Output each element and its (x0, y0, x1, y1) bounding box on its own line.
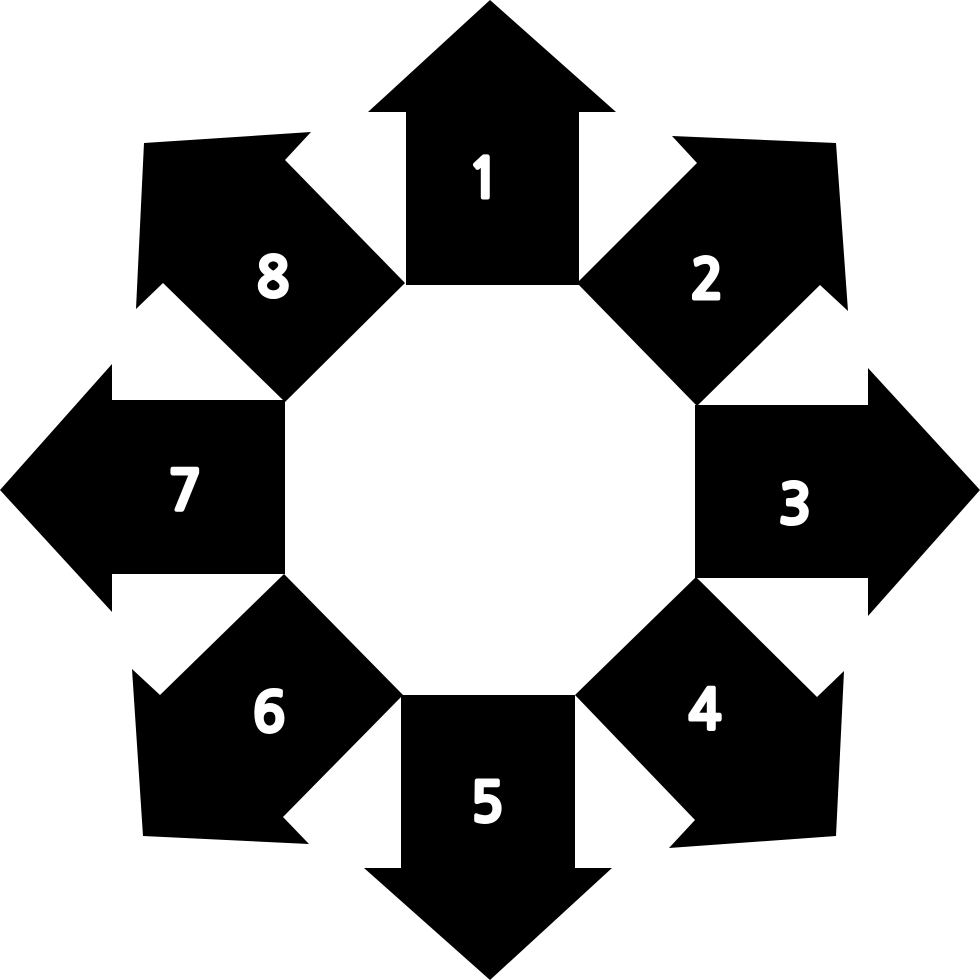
arrow 8: up-left (136, 132, 405, 402)
arrow 1: up (368, 0, 616, 285)
arrow 4: down-right (575, 577, 844, 848)
arrow 2: up-right (577, 136, 848, 406)
arrow 8: up-left: 8 (256, 252, 290, 306)
arrow 7: left (0, 364, 285, 612)
arrow 6: down-left: 6 (252, 687, 286, 741)
arrow 4: down-right: 4 (688, 684, 722, 738)
arrow 2: up-right: 2 (690, 254, 724, 308)
arrow 5: down (364, 695, 612, 980)
arrow 5: down: 5 (470, 777, 504, 831)
arrow 7: left: 7 (168, 465, 202, 519)
arrow 3: right: 3 (778, 479, 812, 533)
arrow 1: up: 1 (467, 153, 501, 207)
arrow 3: right (695, 368, 980, 616)
arrow 6: down-left (132, 574, 403, 844)
